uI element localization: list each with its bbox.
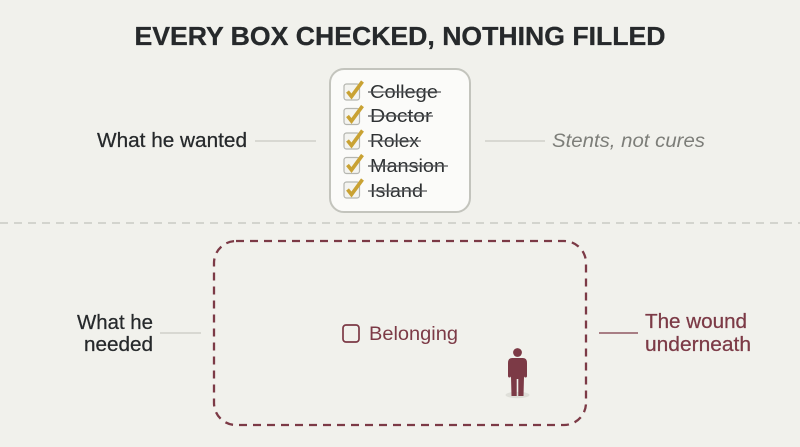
item: Rolex: Rolex [370, 130, 420, 151]
label: the wound underneath: The wound [645, 310, 747, 333]
item: Island: Island [370, 180, 423, 201]
item: Island [344, 180, 427, 201]
item: Doctor: Doctor [370, 105, 432, 126]
label: what he needed: What he [77, 311, 153, 334]
item: Mansion [344, 155, 448, 176]
item: belonging: Belonging [369, 324, 458, 345]
label: stents, not cures: Stents, not cures [552, 131, 706, 152]
panel: dashed empty box [214, 241, 586, 425]
item: College [344, 81, 441, 102]
label: what he wanted: What he wanted [97, 129, 247, 152]
item: College: College [370, 81, 438, 102]
panel: checklist [330, 69, 470, 212]
icon: person [506, 348, 530, 398]
label: what he needed: needed [84, 333, 153, 356]
item: Doctor [344, 105, 433, 126]
title: EVERY BOX CHECKED, NOTHING FILLED [134, 21, 666, 51]
label: the wound underneath [599, 310, 751, 356]
item: Mansion: Mansion [370, 155, 445, 176]
label: the wound underneath: underneath [645, 333, 751, 356]
label: what he needed [77, 311, 201, 356]
item: Rolex [344, 130, 421, 151]
